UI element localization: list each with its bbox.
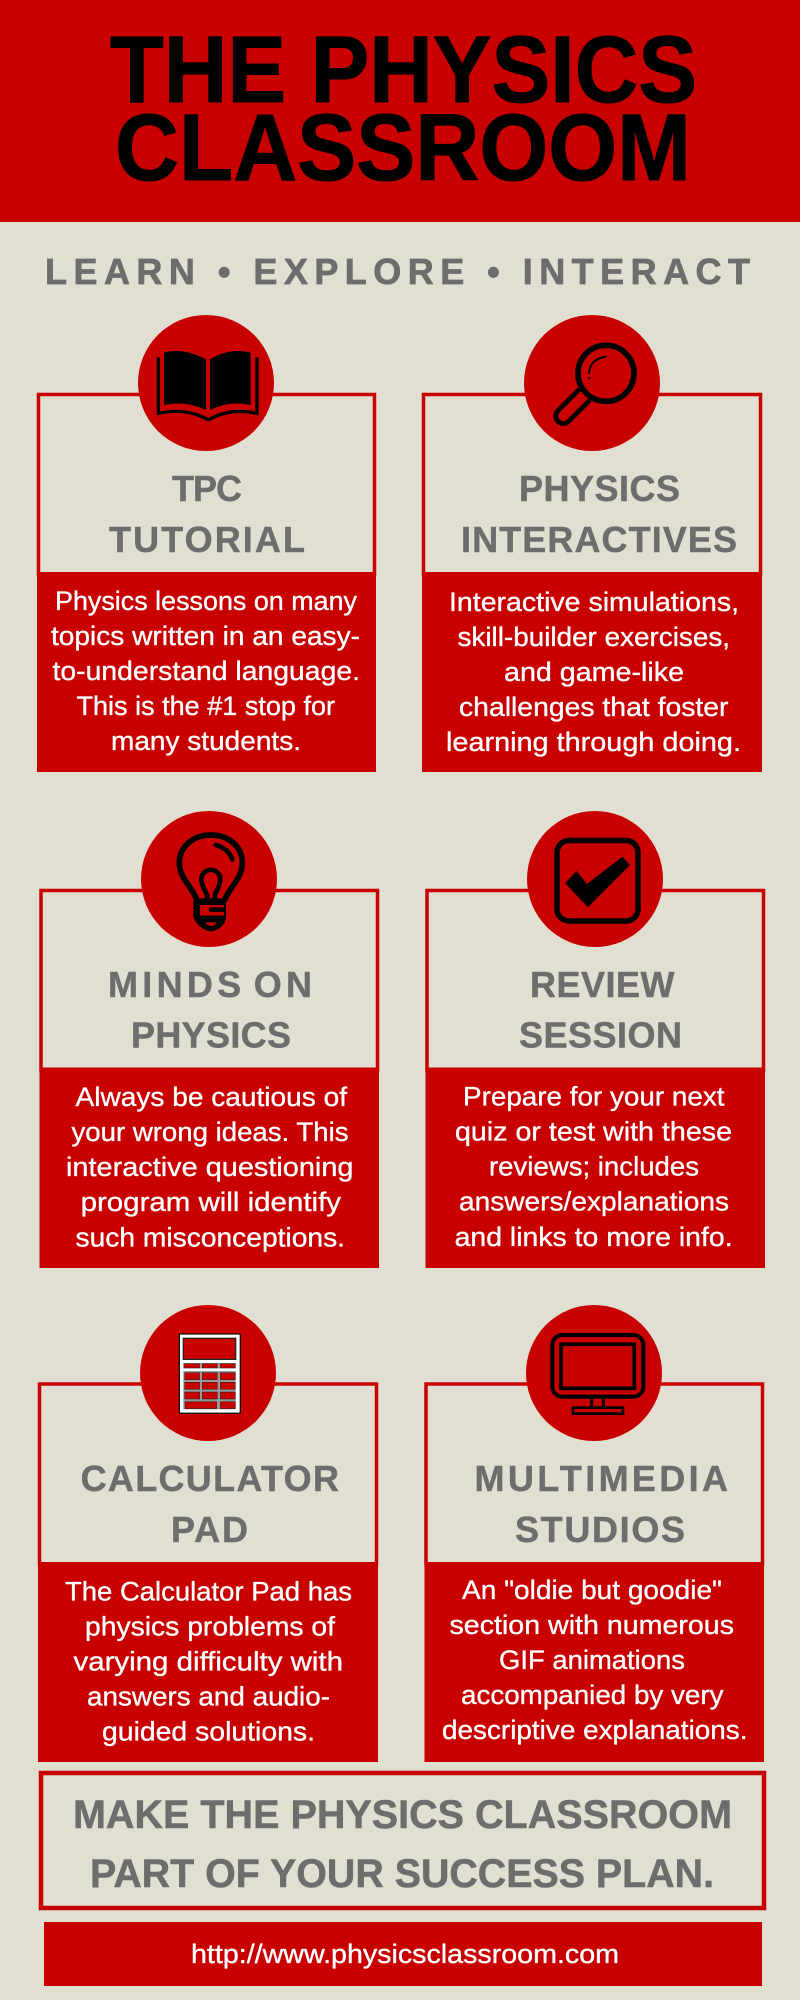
heading: TPC bbox=[172, 468, 242, 509]
heading: STUDIOS bbox=[515, 1509, 685, 1550]
description bbox=[66, 1082, 354, 1252]
description: and links to more info. bbox=[455, 1222, 733, 1252]
header banner: THE PHYSICS bbox=[110, 17, 697, 123]
icon: calculator bbox=[140, 1305, 276, 1441]
description bbox=[442, 1575, 748, 1745]
description: Interactive simulations, bbox=[449, 587, 739, 617]
callout: success plan: PART OF YOUR SUCCESS PLAN. bbox=[90, 1852, 714, 1896]
heading bbox=[519, 964, 682, 1056]
heading: CALCULATOR bbox=[81, 1458, 339, 1499]
description: answers/explanations bbox=[459, 1187, 729, 1217]
description: reviews; includes bbox=[489, 1152, 699, 1182]
heading bbox=[81, 1458, 339, 1550]
description: Physics lessons on many bbox=[55, 586, 358, 616]
description: This is the #1 stop for bbox=[76, 691, 335, 721]
callout: success plan: MAKE THE PHYSICS CLASSROOM bbox=[73, 1793, 732, 1837]
panel: Physics Interactives bbox=[422, 315, 762, 772]
description: An "oldie but goodie" bbox=[462, 1575, 722, 1605]
panel: Multimedia Studios bbox=[424, 1305, 764, 1762]
heading bbox=[108, 964, 312, 1056]
description: physics problems of bbox=[85, 1612, 336, 1642]
icon: monitor bbox=[526, 1305, 662, 1441]
description: and game-like bbox=[504, 657, 684, 687]
heading bbox=[109, 468, 305, 560]
description: topics written in an easy- bbox=[51, 621, 360, 651]
heading bbox=[461, 468, 737, 560]
description: GIF animations bbox=[499, 1645, 685, 1675]
description: challenges that foster bbox=[459, 692, 729, 722]
description: to-understand language. bbox=[52, 656, 360, 686]
header banner bbox=[0, 0, 800, 222]
description: varying difficulty with bbox=[74, 1647, 343, 1677]
description: answers and audio- bbox=[87, 1682, 330, 1712]
description: Always be cautious of bbox=[76, 1082, 348, 1112]
description: quiz or test with these bbox=[455, 1116, 732, 1146]
description: Prepare for your next bbox=[463, 1081, 725, 1111]
description: your wrong ideas. This bbox=[72, 1117, 348, 1147]
description: such misconceptions. bbox=[76, 1222, 345, 1252]
panel: TPC Tutorial bbox=[37, 315, 376, 772]
icon: open book bbox=[138, 315, 274, 451]
heading: MULTIMEDIA bbox=[474, 1458, 728, 1499]
footer URL bar bbox=[44, 1922, 762, 1986]
description: descriptive explanations. bbox=[442, 1715, 748, 1745]
icon: magnifying glass bbox=[524, 315, 660, 451]
description: learning through doing. bbox=[446, 727, 741, 757]
panel: Review Session bbox=[426, 811, 765, 1268]
description: guided solutions. bbox=[102, 1717, 315, 1747]
description: The Calculator Pad has bbox=[65, 1577, 352, 1607]
icon: check box bbox=[527, 811, 663, 947]
description bbox=[65, 1577, 352, 1747]
footer URL bar: http://www.physicsclassroom.com bbox=[191, 1939, 619, 1969]
header banner: CLASSROOM bbox=[115, 95, 691, 201]
description: section with numerous bbox=[450, 1610, 734, 1640]
description: program will identify bbox=[81, 1187, 342, 1217]
panel: Minds On Physics bbox=[40, 811, 379, 1268]
description: skill-builder exercises, bbox=[458, 622, 730, 652]
heading: PHYSICS bbox=[131, 1014, 291, 1056]
tagline: LEARN • EXPLORE • INTERACT bbox=[45, 251, 750, 292]
heading: TUTORIAL bbox=[109, 519, 305, 560]
icon: light bulb bbox=[141, 811, 277, 947]
heading: SESSION bbox=[519, 1014, 682, 1056]
callout: success plan bbox=[41, 1773, 764, 1908]
panel: Calculator Pad bbox=[38, 1305, 378, 1762]
description bbox=[446, 587, 741, 757]
description bbox=[51, 586, 360, 756]
heading bbox=[474, 1458, 728, 1550]
description: accompanied by very bbox=[461, 1680, 724, 1710]
description: many students. bbox=[111, 726, 301, 756]
heading: INTERACTIVES bbox=[461, 519, 737, 560]
heading: PAD bbox=[171, 1509, 248, 1550]
description bbox=[455, 1081, 733, 1252]
heading: MINDS ON bbox=[108, 964, 312, 1005]
heading: PHYSICS bbox=[519, 468, 680, 509]
description: interactive questioning bbox=[66, 1152, 354, 1182]
heading: REVIEW bbox=[530, 964, 675, 1005]
